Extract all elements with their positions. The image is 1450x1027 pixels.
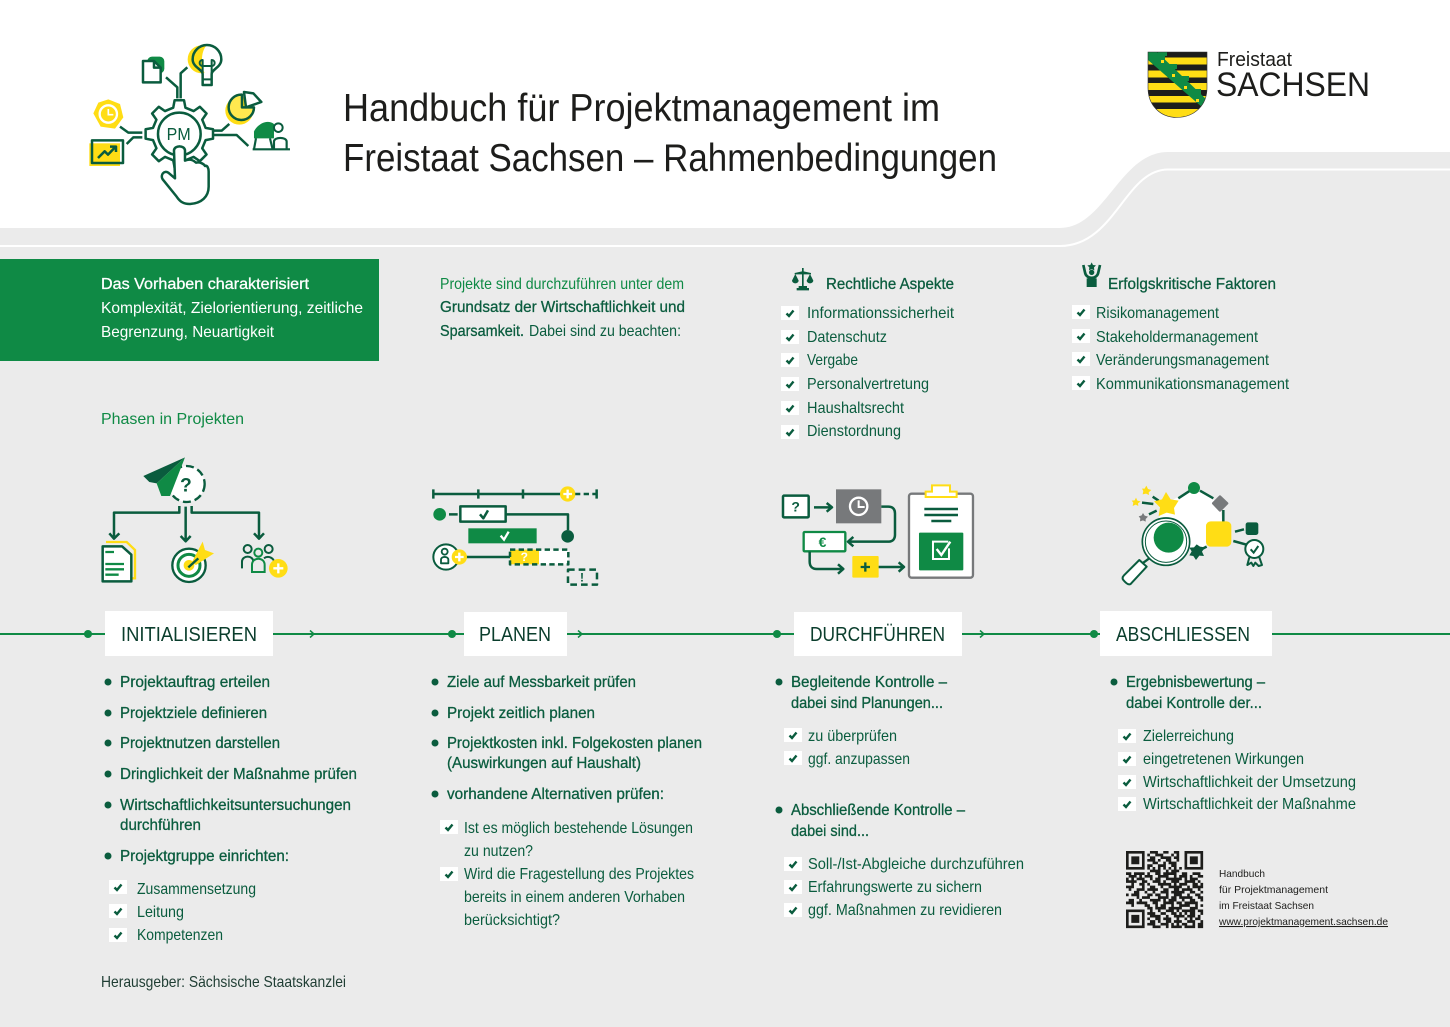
list: Durchfuehren: Begleitende Kontrolle –: [791, 674, 947, 691]
label: Initialisieren: INITIALISIEREN: [121, 624, 257, 646]
list: Abschliessen: Wirtschaftlichkeit der Maßnahme: [1143, 796, 1356, 813]
label: Durchfuehren: DURCHFÜHREN: [810, 624, 945, 646]
panel: Erfolgskritische Faktoren: Risikomanagement: [1096, 305, 1219, 322]
QR caption: im Freistaat Sachsen: [1219, 900, 1314, 912]
list: Initialisieren: Projektziele definieren: [120, 705, 267, 722]
list: Initialisieren: Zusammensetzung: [137, 881, 256, 898]
icon: success person: [1083, 262, 1100, 287]
QR caption: www.projektmanagement.sachsen.de: [1218, 916, 1388, 928]
list: Initialisieren: [104, 674, 357, 944]
list: Planen: [432, 674, 702, 929]
logo: Freistaat Sachsen: Freistaat: [1217, 49, 1292, 71]
text: Grundsatz: Dabei sind zu beachten:: [529, 323, 681, 340]
list: Planen: vorhandene Alternativen prüfen:: [447, 786, 664, 803]
icon: durchfuehren: ?: [791, 499, 800, 515]
panel: Rechtliche Aspekte: Vergabe: [807, 352, 858, 369]
panel: Erfolgskritische Faktoren: [1072, 262, 1289, 393]
icon: project management gear: [89, 45, 290, 204]
list: Initialisieren: Projektauftrag erteilen: [120, 674, 270, 691]
panel: Rechtliche Aspekte: Datenschutz: [807, 329, 887, 346]
panel: Rechtliche Aspekte: Informationssicherheit: [807, 305, 955, 322]
panel: Rechtliche Aspekte: Rechtliche Aspekte: [826, 276, 954, 293]
list: Abschliessen: [1110, 674, 1356, 813]
label: Planen: [464, 612, 567, 656]
list: Initialisieren: Kompetenzen: [137, 927, 223, 944]
icon: scales: [792, 268, 813, 290]
text: Grundsatz: Projekte sind durchzuführen unter dem: [440, 276, 684, 293]
QR caption: Handbuch: [1219, 868, 1265, 880]
list: Planen: berücksichtigt?: [464, 912, 560, 929]
header white band: [0, 0, 1450, 228]
list: Planen: Wird die Fragestellung des Projektes: [464, 866, 694, 883]
list: Planen: Ziele auf Messbarkeit prüfen: [447, 674, 636, 691]
list: Durchfuehren: Erfahrungswerte zu sichern: [808, 879, 982, 896]
heading: Phasen: Phasen in Projekten: [101, 411, 244, 428]
icon: initialisieren: [103, 457, 288, 582]
list: Planen: (Auswirkungen auf Haushalt): [447, 755, 641, 772]
panel: Erfolgskritische Faktoren: Erfolgskritische Faktoren: [1108, 276, 1276, 293]
icon: planen: [433, 486, 597, 585]
panel: Rechtliche Aspekte: Haushaltsrecht: [807, 400, 905, 417]
panel: Erfolgskritische Faktoren: Kommunikationsmanagement: [1096, 376, 1289, 393]
list: Initialisieren: durchführen: [120, 817, 201, 834]
list: Initialisieren: Wirtschaftlichkeitsuntersuchungen: [120, 797, 351, 814]
publisher: Herausgeber: Sächsische Staatskanzlei: [101, 974, 346, 991]
panel: Vorhaben: Begrenzung, Neuartigkeit: [101, 324, 275, 341]
panel: Rechtliche Aspekte: Personalvertretung: [807, 376, 929, 393]
list: Durchfuehren: Soll-/Ist-Abgleiche durchzuführen: [808, 856, 1024, 873]
icon: project management gear: PM: [167, 124, 191, 144]
icon: abschliessen: [1123, 482, 1263, 584]
label: Planen: PLANEN: [479, 624, 551, 646]
icon: durchfuehren: [783, 485, 973, 578]
icon: initialisieren: ?: [180, 475, 192, 496]
list: Abschliessen: dabei Kontrolle der...: [1126, 695, 1262, 712]
label: Abschliessen: ABSCHLIESSEN: [1116, 624, 1250, 646]
label: Durchfuehren: [794, 612, 962, 656]
list: Durchfuehren: [776, 674, 1024, 919]
list: Durchfuehren: Abschließende Kontrolle –: [791, 802, 965, 819]
text: Grundsatz: Grundsatz der Wirtschaftlichkeit und: [440, 299, 685, 316]
list: Durchfuehren: ggf. Maßnahmen zu revidieren: [808, 902, 1002, 919]
panel: Vorhaben: Das Vorhaben charakterisiert: [101, 276, 310, 293]
panel: Erfolgskritische Faktoren: Stakeholdermanagement: [1096, 329, 1259, 346]
icon: planen: !: [580, 571, 584, 585]
icon: planen: ?: [521, 550, 528, 564]
panel: Vorhaben: Komplexität, Zielorientierung, zeitliche: [101, 300, 363, 317]
panel: Vorhaben: [0, 259, 379, 361]
QR caption: für Projektmanagement: [1219, 884, 1328, 896]
list: Abschliessen: Ergebnisbewertung –: [1126, 674, 1265, 691]
panel: Rechtliche Aspekte: Dienstordnung: [807, 423, 901, 440]
QR caption: [1218, 868, 1388, 928]
logo: Freistaat Sachsen: SACHSEN: [1216, 66, 1370, 104]
list: Planen: bereits in einem anderen Vorhaben: [464, 889, 685, 906]
title: [343, 87, 997, 180]
title: Freistaat Sachsen – Rahmenbedingungen: [343, 137, 997, 180]
timeline: [0, 630, 1450, 638]
text: Grundsatz: [440, 276, 685, 340]
list: Initialisieren: Projektgruppe einrichten:: [120, 848, 289, 865]
list: Durchfuehren: zu überprüfen: [808, 728, 897, 745]
list: Planen: Projekt zeitlich planen: [447, 705, 595, 722]
panel: Rechtliche Aspekte: [781, 268, 955, 440]
list: Durchfuehren: dabei sind Planungen...: [791, 695, 943, 712]
panel: Erfolgskritische Faktoren: Veränderungsmanagement: [1096, 352, 1269, 369]
label: Initialisieren: [105, 611, 273, 656]
list: Initialisieren: Dringlichkeit der Maßnahme prüfen: [120, 766, 357, 783]
logo: Freistaat Sachsen: [1148, 49, 1370, 118]
list: Planen: zu nutzen?: [464, 843, 533, 860]
list: Durchfuehren: ggf. anzupassen: [808, 751, 910, 768]
list: Initialisieren: Leitung: [137, 904, 184, 921]
icon: durchfuehren: €: [819, 534, 827, 550]
list: Planen: Ist es möglich bestehende Lösungen: [464, 820, 693, 837]
list: Abschliessen: Wirtschaftlichkeit der Umsetzung: [1143, 774, 1356, 791]
title: Handbuch für Projektmanagement im: [343, 87, 940, 130]
label: Abschliessen: [1100, 611, 1272, 656]
text: Grundsatz: Sparsamkeit.: [440, 323, 524, 340]
list: Abschliessen: Zielerreichung: [1143, 728, 1234, 745]
list: Initialisieren: Projektnutzen darstellen: [120, 735, 280, 752]
list: Planen: Projektkosten inkl. Folgekosten planen: [447, 735, 702, 752]
QR code: [1126, 852, 1203, 927]
header curve line: [0, 170, 1450, 246]
list: Durchfuehren: dabei sind...: [791, 823, 869, 840]
list: Abschliessen: eingetretenen Wirkungen: [1143, 751, 1304, 768]
